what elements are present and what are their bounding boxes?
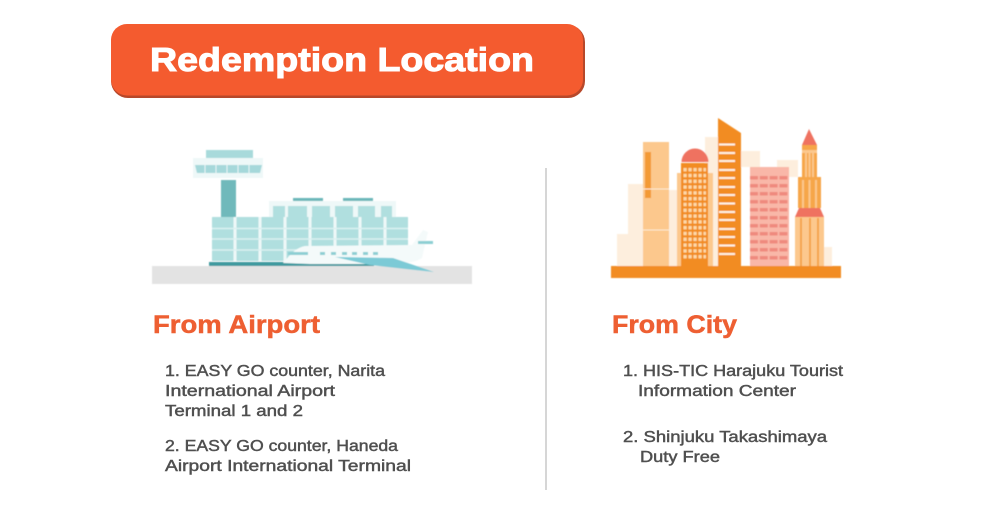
title banner [111,24,585,98]
text block: airport location 1: Terminal 1 and 2 [165,403,303,420]
building: domed tower [677,148,713,266]
terminal base [209,262,374,266]
text block: city location 1: 1. HIS-TIC Harajuku Tourist [623,363,844,380]
text block: city location 1: Information Center [638,383,796,400]
text block: airport location 1 [165,363,385,420]
airplane [283,230,434,272]
text block: airport location 2: Airport International Terminal [165,458,411,475]
text block: airport location 1: 1. EASY GO counter, Narita [165,363,385,380]
text block: airport location 1: International Airport [165,383,336,400]
building: angular orange skyscraper [718,118,741,266]
heading: from city: From City [612,311,737,339]
icon: city skyline illustration [611,118,841,278]
building: tall peach tower [643,142,669,266]
text block: city location 2: 2. Shinjuku Takashimaya [623,429,827,446]
text block: city location 2: Duty Free [640,449,720,466]
ground [152,266,472,284]
background buildings [617,137,832,266]
panel: from city [612,311,844,466]
text block: city location 1 [623,363,844,400]
main terminal [212,217,408,261]
control tower [193,150,263,217]
divider [545,168,547,490]
panel: from airport [153,311,411,475]
title text: Redemption Location [150,41,534,78]
icon: airport illustration [152,150,472,284]
text block: airport location 2 [165,438,411,475]
building: pink office block [750,167,789,266]
upper terminal level [269,198,396,217]
city base [611,266,841,278]
text block: airport location 2: 2. EASY GO counter, Haneda [165,438,398,455]
text block: city location 2 [623,429,827,466]
building: clock tower with spire [795,129,824,266]
heading: from airport: From Airport [153,311,321,339]
